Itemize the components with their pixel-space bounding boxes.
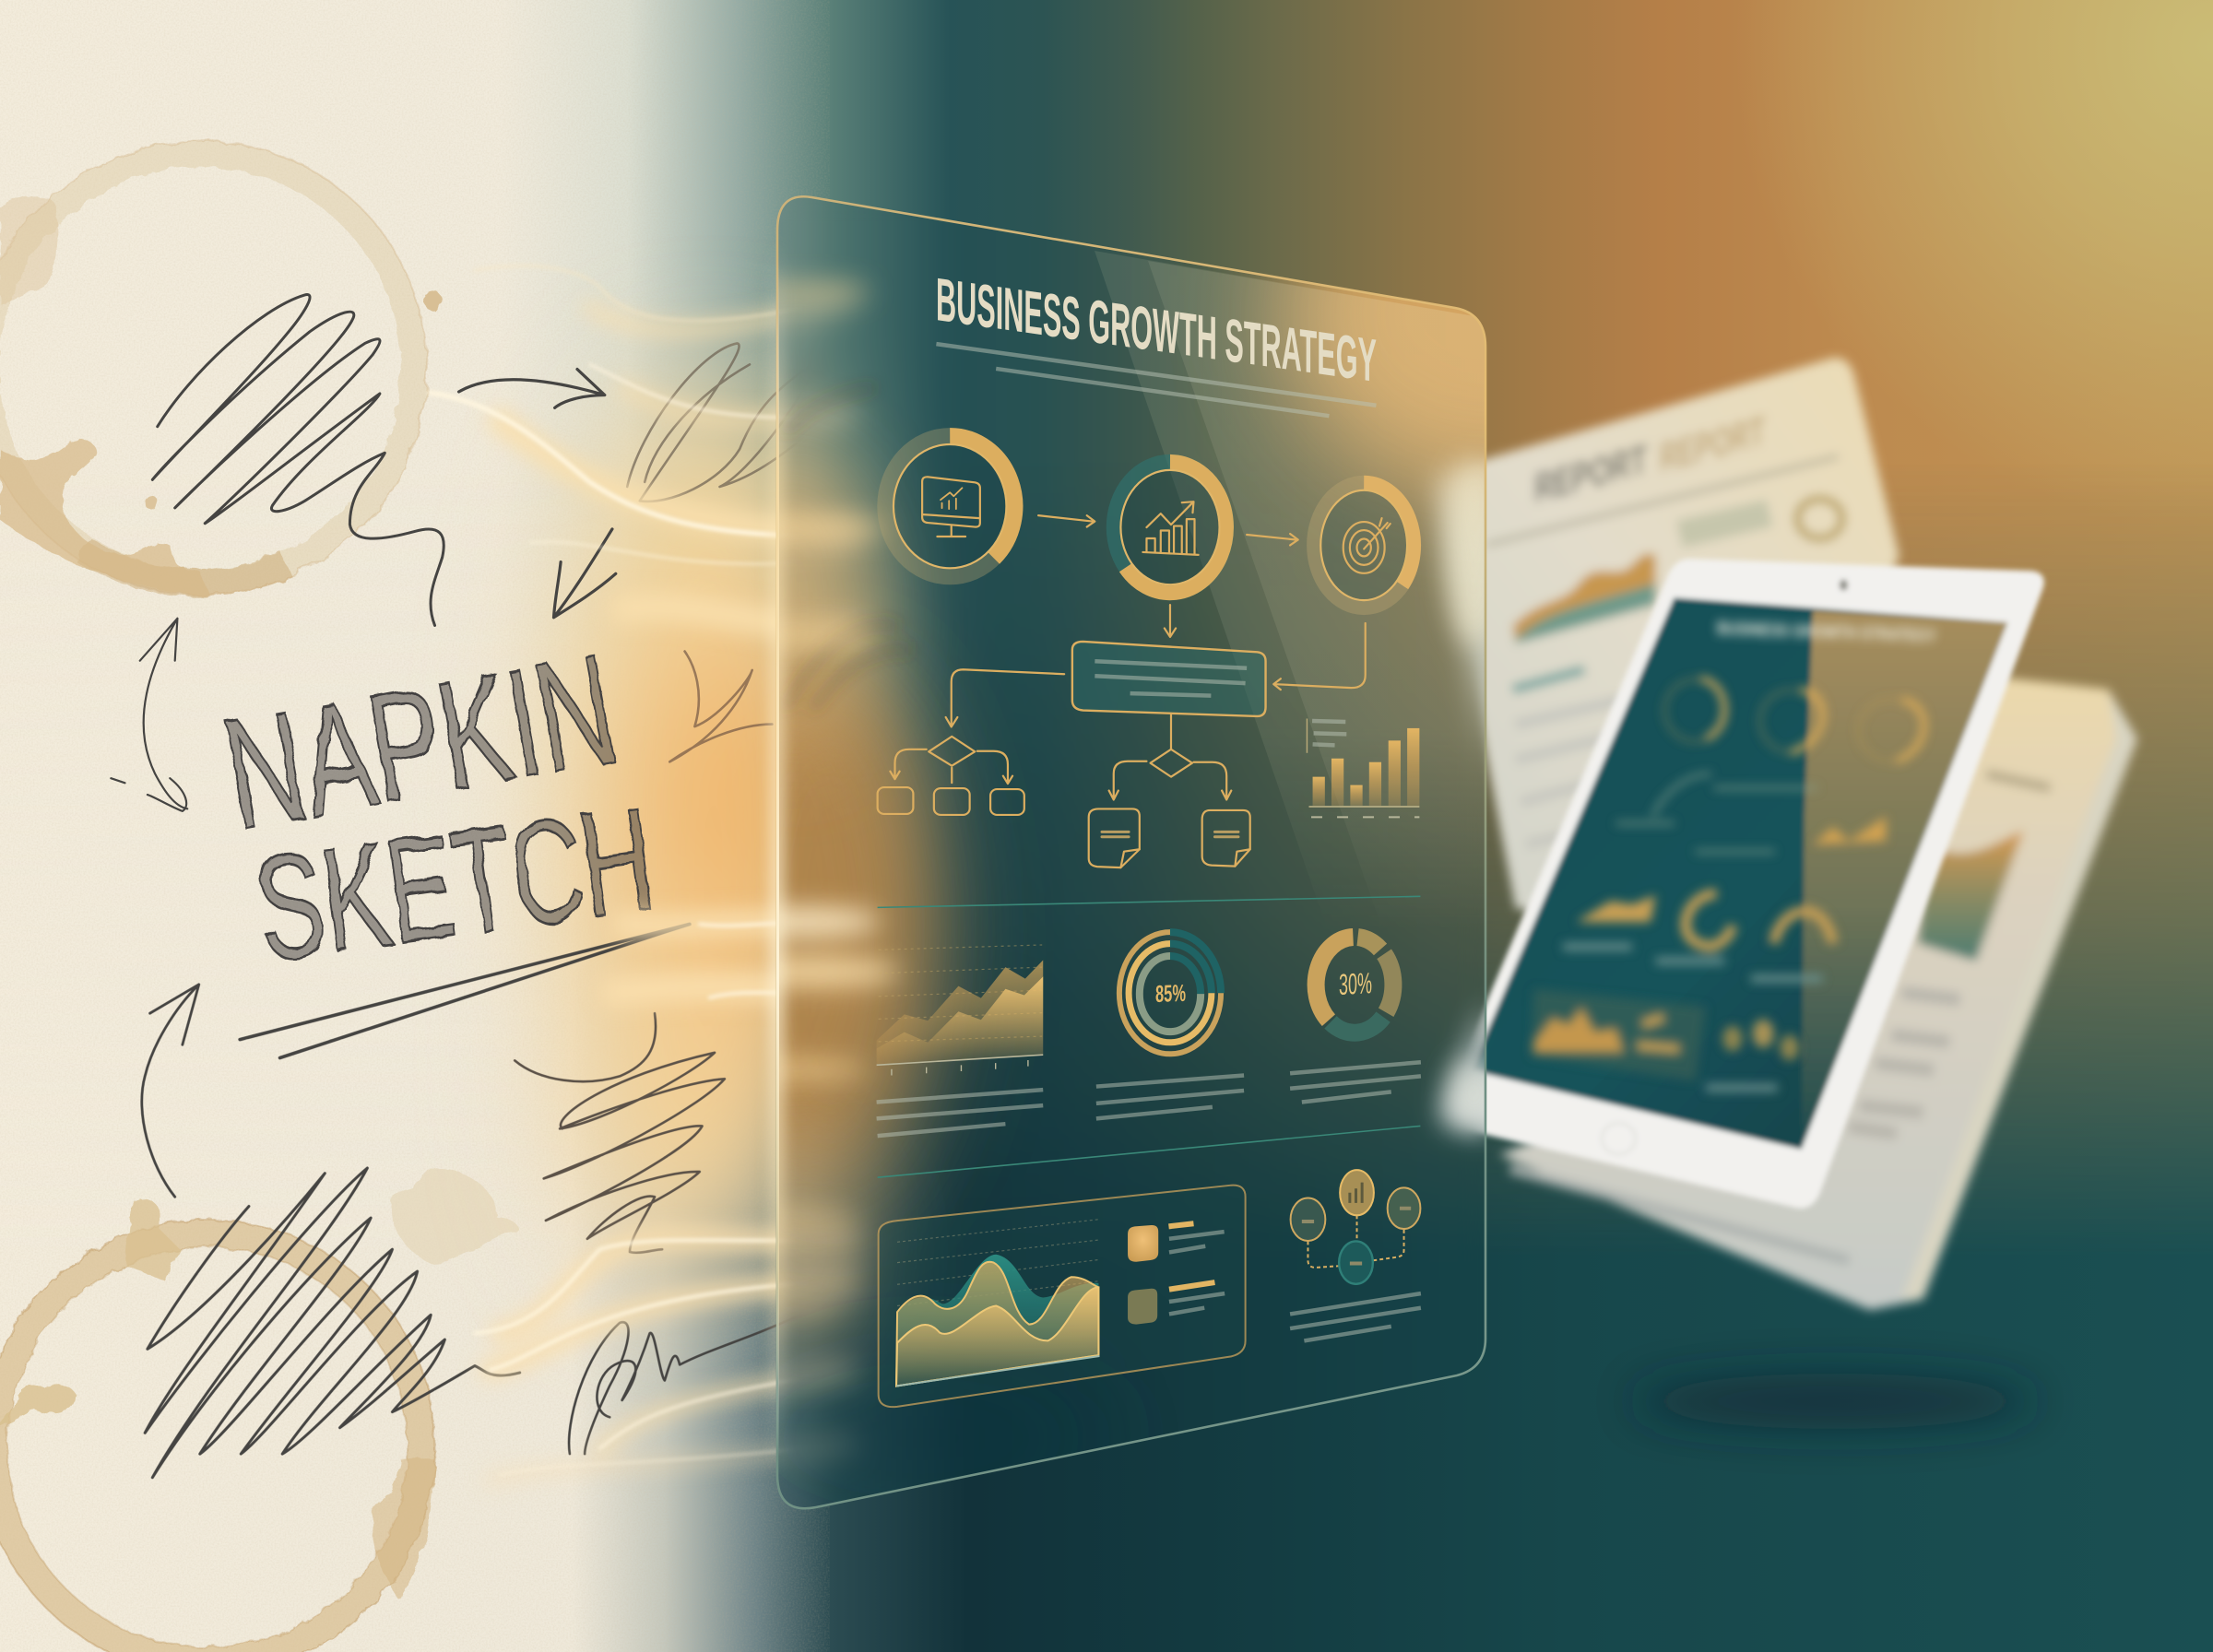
node network [1290,1170,1421,1340]
back report sheet [1434,358,1899,957]
dashboard card [879,1186,1246,1407]
pencil scribbles, lower [142,924,799,1478]
panel left bright edge glow [772,240,783,1475]
donut value label: 30% [1339,966,1372,1001]
note card right [1202,810,1250,867]
tan glow inside left edge [678,682,908,1162]
ghost signature fading into panel [627,343,859,502]
panel outline [777,196,1485,1508]
frosted glass blur behind panel [778,211,1485,1503]
tablet [1441,559,2044,1209]
stacked sheets behind tablet [1499,675,2137,1310]
divider [878,896,1420,907]
glass panel with infographic: BUSINESS GROWTH STRATEGY [936,266,1377,395]
ring: target icon [1314,483,1414,608]
paper grain texture [0,0,830,1652]
ghost check mark [669,651,772,761]
underline [240,924,690,1058]
scribble: top zigzag [152,295,444,625]
background lower teal wash [559,506,2213,1652]
report sheet seen through glass [1446,461,1501,645]
gauge value label: 85% [1155,979,1186,1008]
floating shadow [1632,1374,2038,1429]
light streams, bright filaments [430,266,849,1475]
connector: ring 3 to box [1273,623,1366,690]
radial gauge [1096,932,1244,1118]
arrow: double headed [111,619,187,811]
light streams, soft [490,299,849,1481]
lower infographic section [877,896,1421,1407]
ring: monitor icon [885,436,1014,576]
blurred sketch strokes behind glass [784,387,913,710]
tablet body [1441,559,2044,1209]
tablet screen content [1532,619,1936,1088]
arrow: right [459,369,605,407]
tablet screen heading: BUSINESS GROWTH STRATEGY [1717,619,1936,646]
legend rows [1128,1223,1225,1325]
tablet corner seen through glass [1450,1059,1497,1126]
word: SKETCH: SKETCH [248,775,663,992]
stain: bottom ring [0,1170,517,1652]
flow branch: left [878,737,1024,815]
warm glow behind the panel edge [553,378,867,1281]
glass sheen [1095,251,1512,931]
divider [878,1126,1420,1177]
ring: growth chart icon [1114,462,1226,593]
glass panel with infographic [762,195,1486,1510]
hand-lettered title [213,622,663,992]
bar chart [1307,718,1419,817]
pencil scribbles, upper [111,295,859,811]
arrow: step 2 to 3 [1247,534,1298,545]
arrow: down-left [554,529,616,618]
panel glass fill [778,197,1485,1507]
report heading, tan: REPORT [1660,407,1765,481]
signature scribble [569,1315,799,1454]
connector: box to left diamond [946,669,1064,726]
donut chart [1290,938,1421,1103]
scribble: right zigzag [515,1013,725,1253]
stain: top ring [0,141,443,595]
report heading, gray: REPORT [1534,436,1647,512]
arrow: step 1 to 2 [1038,515,1095,527]
scribble: bottom zigzag [145,1168,520,1478]
arrow: up [142,985,199,1197]
title underlines [936,344,1376,416]
coffee ring stains [0,141,517,1652]
wave area chart [896,1255,1099,1386]
central text box [1072,642,1266,716]
blurred reports and tablet in background [1434,358,2137,1429]
light wisps crossing the glass [715,283,899,1317]
word: NAPKIN: NAPKIN [213,622,629,862]
arrow: ring 2 down to box [1165,605,1176,637]
tablet screen [1471,597,2007,1150]
upper infographic section [878,344,1419,867]
area chart [877,945,1043,1136]
flow branch: center [1089,714,1250,867]
note card left [1089,808,1140,867]
